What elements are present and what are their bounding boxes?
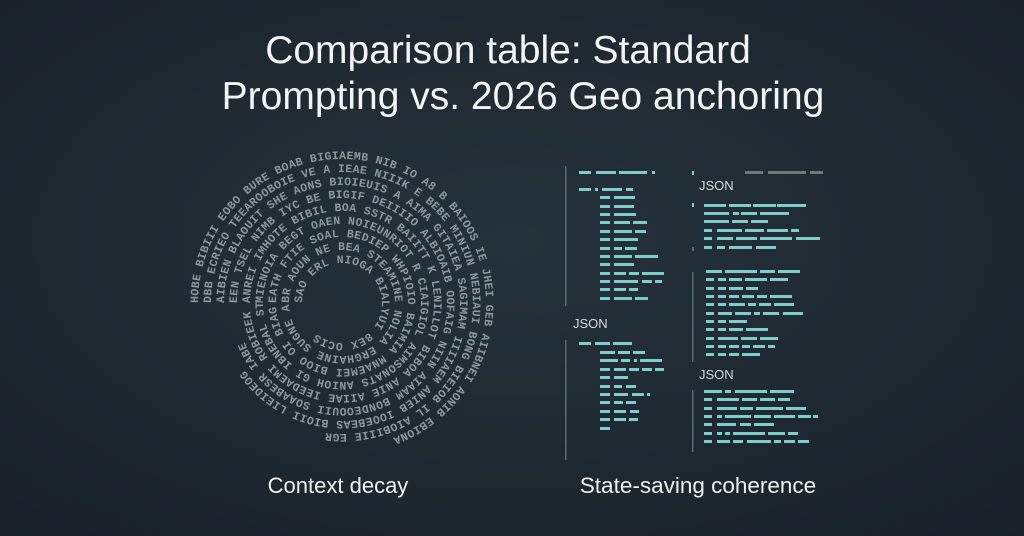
chart: context decay spiral: ANREI IMHOTE BIBIL BOA SSTR BAIITT K LENILLOT BIBOA ANIE AIIAE IEEDAEMI ROBIEEK [242, 203, 442, 403]
chart: context decay spiral: AIBIEN BLAOUIT SHE AONS BIOIEUIS A AIMA GITAIEA SAGIMAM IIIIAEM ANIEB IOOEBEAS BIOII LIEIDEOG [216, 177, 468, 429]
title: Comparison table: Standard [265, 29, 751, 72]
code block: top left [565, 166, 664, 306]
chart: context decay spiral: HOBE BIBIII EOBO BURE BOAB BIGIAEMB NIB IO A8 B BAIOOS IE JHEI GEB AIIBNEI AONIB EBIONA [190, 151, 494, 444]
code block: bottom left: JSON [573, 316, 608, 331]
chart: JSON blocks [565, 166, 823, 460]
title: Prompting vs. 2026 Geo anchoring [222, 75, 824, 118]
chart: context decay spiral: DBB ECRIEO TEEAROOBOIE VE A IEAE NIIIK E BEBE MINIUN NEBIAUI BONG BIEIOB IL AIOBIIIE EGR [203, 164, 480, 442]
code block: top right [692, 171, 823, 251]
label: state-saving coherence: State-saving coherence [580, 473, 816, 498]
code block: top right: JSON [699, 178, 734, 193]
code block: bottom right: JSON [699, 367, 734, 382]
chart: context decay spiral: SAO ERL NIOGA BIALYUI 8EX OCIS [294, 255, 390, 351]
code block: bottom left [565, 316, 664, 460]
code block: middle right [692, 270, 803, 362]
title [222, 29, 824, 118]
code block: bottom right [692, 367, 818, 452]
label: context decay: Context decay [268, 473, 408, 498]
chart: context decay spiral: EEN TSEL NIMB IYC BE BIGIF DEIIIIO ALBIOAIB OOFAIG NIIN AIAAM BONDEOOUII SOAABESR IABE [229, 190, 455, 416]
